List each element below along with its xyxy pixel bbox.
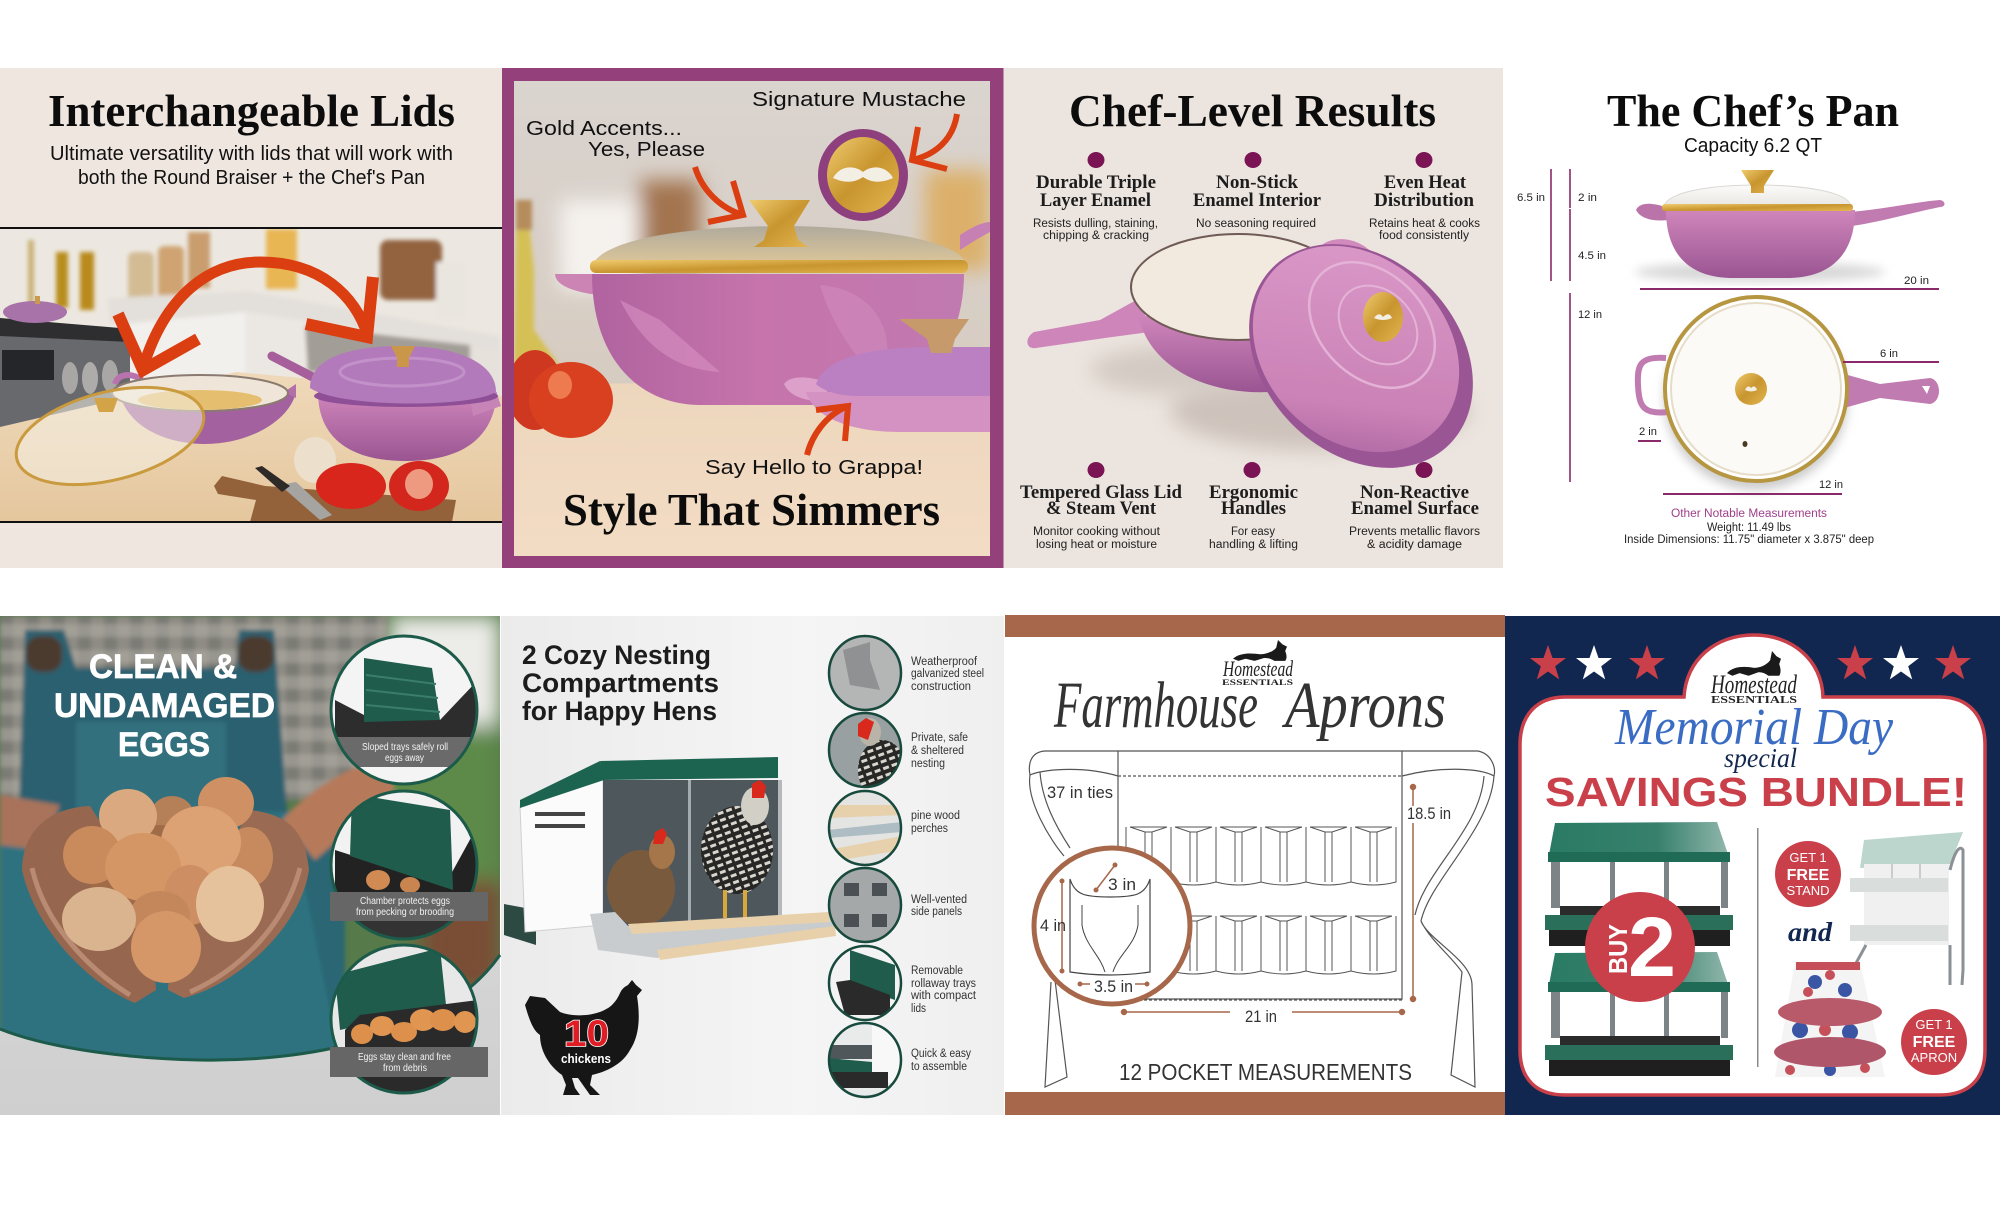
- nesting boxes: [1545, 822, 1733, 1076]
- arrow: to gold knob: [695, 167, 743, 222]
- feature: rollaway trays: rollaway trays: [911, 978, 976, 990]
- subtitle: both the Round Braiser + the Chef's Pan: [78, 167, 425, 189]
- feature: durable triple layer enamel: chipping & cracking: [1043, 230, 1149, 242]
- kitchen photo with pans: [0, 228, 502, 522]
- badge: free stand: FREE: [1787, 867, 1830, 884]
- stars: [1530, 645, 1971, 679]
- pocket detail circle: 4 in: [1040, 916, 1066, 935]
- pan with lid illustration: [1027, 199, 1518, 513]
- title: farmhouse aprons: Farmhouse: [1053, 669, 1258, 742]
- badge: free apron: FREE: [1913, 1034, 1956, 1051]
- other notable measurements: [1624, 508, 1874, 546]
- feature: easy assembly: to assemble: [911, 1061, 967, 1073]
- badge: free stand: [1775, 841, 1841, 907]
- cupped hands: [22, 806, 309, 1003]
- feature: private nesting: [828, 712, 968, 788]
- pocket row two: [1126, 916, 1396, 974]
- panel: memorial day savings bundle: [1505, 616, 2000, 1115]
- feature: rollaway trays: Removable: [911, 965, 963, 977]
- measurement labels: 37 in ties: [1047, 783, 1113, 802]
- feature: non-reactive enamel surface: & acidity damage: [1367, 539, 1462, 551]
- small pot: [784, 319, 990, 432]
- capacity: Capacity 6.2 QT: [1684, 135, 1822, 157]
- circle: eggs stay clean: [330, 945, 488, 1100]
- feature: private nesting: nesting: [911, 758, 945, 770]
- feature: well-vented panels: Well-vented: [911, 894, 967, 906]
- badge: free stand: STAND: [1786, 883, 1830, 898]
- subtitle: Ultimate versatility with lids that will work with: [50, 143, 453, 165]
- feature: non-reactive enamel surface: Non-Reactive: [1360, 483, 1469, 503]
- chicken capacity badge: chickens: [561, 1051, 611, 1066]
- feature: non-reactive enamel surface: [1349, 462, 1480, 551]
- dimension labels: 2 in: [1639, 426, 1657, 438]
- bottom brown band: [1005, 1092, 1505, 1115]
- left pan with food: [112, 375, 296, 444]
- feature: well-vented panels: side panels: [911, 906, 962, 918]
- logo: homestead essentials: Homestead: [1222, 656, 1294, 681]
- heading: clean and undamaged eggs: CLEAN &: [89, 648, 237, 686]
- feature: durable triple layer enamel: [1033, 152, 1158, 242]
- heading: 2 cozy nesting compartments: for Happy Hens: [522, 696, 717, 726]
- brown hen: [607, 828, 675, 926]
- callout: gold accents: [526, 118, 705, 161]
- heading: interchangeable lids: Interchangeable Lids: [48, 85, 455, 136]
- pocket row one: [1126, 827, 1396, 885]
- lid: [1204, 199, 1518, 513]
- circle: eggs stay clean: from debris: [383, 1063, 427, 1074]
- feature: galvanized steel: [828, 635, 984, 711]
- feature: non-stick enamel interior: [1193, 152, 1321, 230]
- arrow: swap between pans: [118, 262, 373, 370]
- logo: homestead essentials: ESSENTIALS: [1711, 695, 1798, 706]
- measurement labels: [1047, 783, 1451, 1026]
- feature: non-stick enamel interior: Non-Stick: [1216, 173, 1299, 193]
- apron line drawing: [1029, 751, 1494, 1087]
- arrow: to small pot: [807, 406, 848, 455]
- circle: sloped trays: [330, 636, 480, 787]
- other notable measurements: Other Notable Measurements: [1671, 508, 1827, 520]
- glass lid: [14, 386, 206, 486]
- circle: sloped trays: Sloped trays safely roll: [362, 742, 448, 753]
- badge: buy 2: 2: [1628, 900, 1676, 994]
- feature: ergonomic handles: handling & lifting: [1209, 539, 1298, 551]
- feature: rollaway trays: lids: [911, 1003, 926, 1015]
- feature: private nesting: & sheltered: [911, 745, 964, 757]
- feature: rollaway trays: with compact: [910, 990, 977, 1002]
- eggs: [62, 777, 273, 983]
- cutting board with vegetables: [214, 437, 456, 522]
- circle: chamber protects eggs: from pecking or brooding: [356, 907, 454, 918]
- feature: non-reactive enamel surface: Prevents metallic flavors: [1349, 526, 1480, 538]
- panel: clean and undamaged eggs: [0, 616, 500, 1115]
- logo: homestead essentials: [1222, 640, 1294, 687]
- dimension labels: 12 in: [1819, 479, 1843, 491]
- panel: interchangeable lids: [0, 68, 502, 568]
- heading: savings bundle: SAVINGS BUNDLE!: [1545, 769, 1967, 815]
- feature: galvanized steel: galvanized steel: [911, 668, 984, 680]
- arrow: to mustache: [912, 114, 957, 169]
- feature: galvanized steel: construction: [911, 681, 971, 693]
- dimension labels: [1517, 192, 1929, 491]
- feature: durable triple layer enamel: Durable Triple: [1036, 173, 1156, 193]
- feature: pine wood perches: [828, 790, 960, 866]
- dimension labels: 6.5 in: [1517, 192, 1545, 204]
- heading: clean and undamaged eggs: UNDAMAGED: [54, 687, 275, 725]
- measurement labels: 21 in: [1245, 1007, 1277, 1026]
- circle: chamber protects eggs: Chamber protects eggs: [360, 896, 450, 907]
- badge: buy 2: [1585, 892, 1695, 1002]
- feature: non-reactive enamel surface: Enamel Surface: [1351, 499, 1479, 519]
- hero photo: [507, 81, 990, 556]
- feature: ergonomic handles: Ergonomic: [1209, 483, 1298, 503]
- feature: durable triple layer enamel: Resists dulling, staining,: [1033, 218, 1158, 230]
- feature: tempered glass lid: [1020, 462, 1183, 551]
- callout: gold accents: Yes, Please: [588, 139, 705, 161]
- farmer photo: [0, 616, 500, 1067]
- photo rules: [0, 227, 502, 523]
- feature: galvanized steel: Weatherproof: [911, 656, 978, 668]
- chicken capacity badge: 10: [564, 1013, 609, 1054]
- badge: free apron: GET 1: [1915, 1017, 1953, 1032]
- dimension lines: [1551, 169, 1939, 494]
- feature: tempered glass lid: Monitor cooking without: [1033, 526, 1161, 538]
- top brown band: [1005, 615, 1505, 637]
- panel: style that simmers: [502, 68, 1002, 568]
- dimension labels: 2 in: [1578, 192, 1597, 204]
- feature: ergonomic handles: [1209, 462, 1298, 551]
- callout: gold accents: Gold Accents...: [526, 118, 682, 140]
- divider: [1757, 828, 1758, 1067]
- caption: 12 pocket measurements: 12 POCKET MEASUREMENTS: [1119, 1059, 1412, 1085]
- circle: sloped trays: eggs away: [385, 753, 424, 764]
- logo: homestead essentials: Homestead: [1710, 670, 1798, 699]
- large pot: [555, 200, 990, 405]
- pocket detail circle: [1034, 848, 1190, 1004]
- right pot with lid: [272, 346, 501, 461]
- top view pan: [1638, 297, 1939, 490]
- logo: homestead essentials: [1710, 651, 1798, 706]
- heading: 2 cozy nesting compartments: 2 Cozy Nesting: [522, 640, 711, 670]
- green curve edge: [0, 955, 500, 1060]
- heading: clean and undamaged eggs: EGGS: [118, 726, 210, 764]
- stand product: [1850, 832, 1963, 985]
- feature: tempered glass lid: & Steam Vent: [1046, 499, 1157, 519]
- badge: free apron: APRON: [1911, 1050, 1957, 1065]
- panel: nesting box features: [501, 616, 1004, 1115]
- feature: easy assembly: [828, 1023, 971, 1099]
- feature: even heat distribution: Distribution: [1374, 191, 1475, 211]
- side view pan: [1635, 170, 1944, 282]
- feature: even heat distribution: food consistently: [1379, 230, 1469, 242]
- feature: non-stick enamel interior: No seasoning required: [1196, 218, 1316, 230]
- subheading: special: special: [1724, 743, 1797, 773]
- word: and: and: [1788, 917, 1833, 947]
- feature: even heat distribution: Retains heat & cooks: [1369, 218, 1480, 230]
- title: farmhouse aprons: Aprons: [1282, 669, 1446, 742]
- dimension labels: 12 in: [1578, 309, 1602, 321]
- feature: easy assembly: Quick & easy: [911, 1048, 971, 1060]
- measurement lines: [1122, 784, 1416, 1014]
- badge: buy 2: BUY: [1603, 924, 1633, 974]
- pocket detail circle: 3.5 in: [1094, 977, 1133, 996]
- feature: even heat distribution: [1369, 152, 1480, 242]
- card with arch: [1520, 635, 1985, 1095]
- feature: durable triple layer enamel: Layer Enamel: [1040, 191, 1151, 211]
- medallion: signature mustache: [818, 129, 908, 221]
- logo: homestead essentials: ESSENTIALS: [1222, 678, 1294, 687]
- measurement labels: 18.5 in: [1407, 804, 1451, 823]
- subtitle: [50, 143, 453, 189]
- callout: signature mustache: Signature Mustache: [752, 89, 966, 111]
- other notable measurements: Weight: 11.49 lbs: [1707, 522, 1791, 534]
- patriotic apron: [1774, 962, 1886, 1077]
- heading: 2 cozy nesting compartments: Compartments: [522, 668, 719, 698]
- circle: eggs stay clean: Eggs stay clean and free: [358, 1052, 451, 1063]
- oil bottle: [514, 200, 559, 365]
- feature: tempered glass lid: losing heat or moisture: [1036, 539, 1157, 551]
- speckled hen: [701, 780, 773, 918]
- feature: rollaway trays: [828, 946, 977, 1022]
- feature: pine wood perches: pine wood: [911, 810, 960, 822]
- feature: private nesting: Private, safe: [911, 732, 968, 744]
- panel: chef-level results: [1002, 68, 1518, 568]
- badge: free stand: GET 1: [1789, 850, 1827, 865]
- feature: well-vented panels: [828, 868, 967, 944]
- heading: style that simmers: Style That Simmers: [563, 484, 940, 535]
- nesting box illustration: [504, 757, 836, 960]
- circle: chamber protects eggs: [330, 791, 488, 945]
- feature: tempered glass lid: Tempered Glass Lid: [1020, 483, 1183, 503]
- feature: ergonomic handles: For easy: [1231, 526, 1275, 538]
- heading: 2 cozy nesting compartments: [522, 640, 719, 726]
- feature: pine wood perches: perches: [911, 823, 948, 835]
- heading: chef-level results: Chef-Level Results: [1069, 85, 1436, 136]
- tomatoes: [507, 350, 613, 438]
- pocket detail circle: 3 in: [1108, 875, 1136, 894]
- heading: clean and undamaged eggs: [54, 648, 275, 764]
- feature: even heat distribution: Even Heat: [1384, 173, 1467, 193]
- badge: free apron: [1901, 1009, 1967, 1075]
- panel: the chef's pan measurements: [1517, 85, 1944, 546]
- heading: memorial day: Memorial Day: [1614, 699, 1894, 756]
- dimension labels: 20 in: [1904, 275, 1929, 287]
- other notable measurements: Inside Dimensions: 11.75" diameter x 3.875" deep: [1624, 534, 1874, 546]
- chicken capacity badge: [525, 980, 642, 1095]
- feature: ergonomic handles: Handles: [1221, 499, 1286, 519]
- panel: farmhouse aprons: [1005, 615, 1505, 1115]
- dimension labels: 6 in: [1880, 348, 1898, 360]
- callout: grappa: Say Hello to Grappa!: [705, 457, 923, 479]
- feature: non-stick enamel interior: Enamel Interior: [1193, 191, 1321, 211]
- heading: the chef's pan: The Chef’s Pan: [1607, 85, 1899, 136]
- dimension labels: 4.5 in: [1578, 250, 1606, 262]
